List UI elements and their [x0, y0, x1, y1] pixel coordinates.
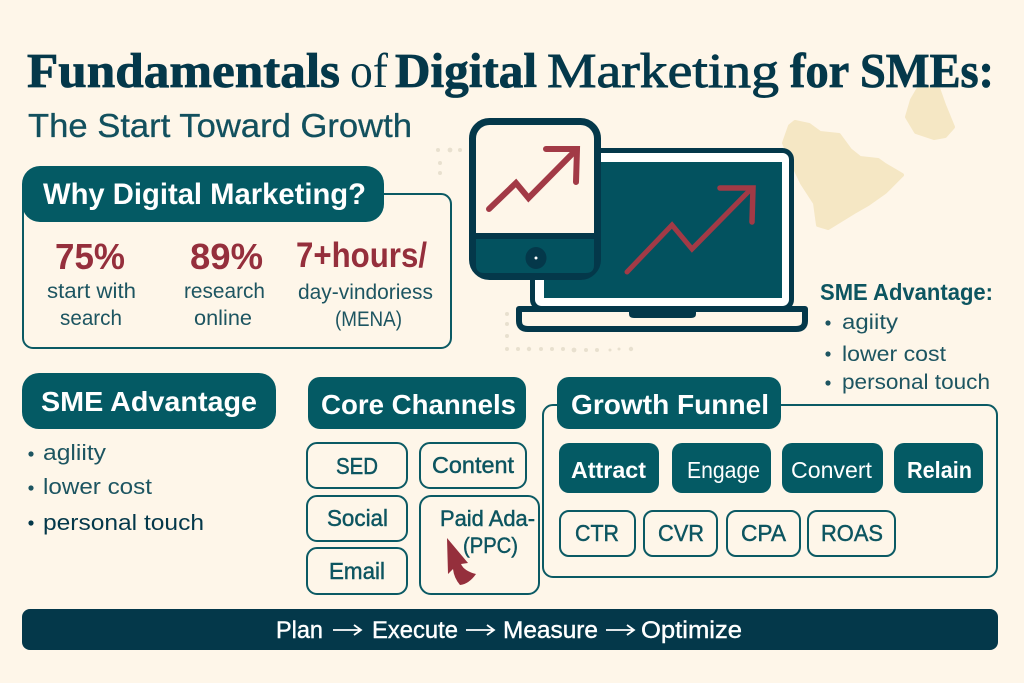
heading: sme advantage [22, 373, 276, 429]
channel: social [307, 496, 407, 541]
bullet list: lower cost [43, 474, 152, 499]
text block: sme advantage (right): SME Advantage: [820, 279, 993, 305]
stat: 89%: 89% [190, 236, 263, 277]
stage: retain [894, 443, 983, 493]
stat: 7+ hours: 7+hours/ [296, 236, 427, 275]
metric: CVR [644, 511, 717, 556]
subtitle: The Start Toward Growth [28, 107, 412, 144]
channel: SED [307, 443, 407, 488]
metric: CPA: CPA [741, 520, 787, 546]
text block: sme advantage (right): agiity [842, 311, 899, 334]
title: for SMEs: [790, 43, 994, 98]
channel: content: Content [432, 452, 515, 478]
stat: 89% [184, 236, 265, 330]
stage: attract: Attract [571, 457, 646, 483]
channel: social: Social [327, 505, 388, 531]
channel: email: Email [329, 558, 385, 584]
heading: core channels: Core Channels [321, 389, 516, 420]
panel: why digital marketing [22, 166, 451, 348]
stage: engage: Engage [687, 457, 760, 483]
channel: SED: SED [336, 453, 378, 479]
icon: laptop with growth chart [519, 150, 805, 329]
stat: 89%: research [184, 280, 265, 303]
stage: retain: Relain [907, 457, 972, 483]
title: Marketing [547, 43, 779, 98]
panel: core channels [307, 377, 539, 594]
heading: growth funnel: Growth Funnel [571, 389, 769, 420]
stage: convert: Convert [791, 457, 873, 483]
stat: 7+ hours: (MENA) [335, 308, 402, 331]
stage: attract [559, 443, 659, 493]
text block: sme advantage (right) [820, 279, 993, 394]
metric: CPA [727, 511, 800, 556]
process bar: Plan [276, 617, 323, 644]
heading: why digital marketing [22, 166, 384, 222]
icon: tablet with growth chart [472, 122, 598, 276]
text block: sme advantage (right): lower cost [842, 343, 946, 366]
heading: core channels [308, 377, 526, 429]
bullet list [28, 440, 204, 535]
stat: 75%: search [60, 307, 122, 330]
heading: why digital marketing: Why Digital Marketing? [43, 178, 366, 211]
bullet list: personal touch [43, 510, 204, 535]
stage: convert [782, 443, 883, 493]
metric: ROAS [808, 511, 895, 556]
channel: paid ads: (PPC) [463, 533, 518, 558]
channel: content [420, 443, 526, 488]
channel: email [307, 548, 407, 594]
heading: sme advantage: SME Advantage [41, 386, 257, 417]
stat: 75% [47, 236, 136, 330]
channel: paid ads: Paid Ada- [440, 506, 535, 531]
text block: sme advantage (right): personal touch [842, 371, 990, 394]
title: of [350, 43, 389, 98]
metric: CTR: CTR [575, 520, 619, 546]
metric: ROAS: ROAS [821, 520, 883, 546]
process bar [22, 609, 998, 650]
process bar: Measure [503, 617, 598, 644]
metric: CTR [560, 511, 635, 556]
bullet list: agliity [43, 440, 106, 465]
background map shapes [784, 88, 953, 228]
channel: paid ads [420, 496, 539, 594]
icon: cursor [447, 538, 476, 585]
stat: 75%: start with [47, 280, 136, 303]
title: Fundamentals [27, 43, 340, 98]
process bar: Execute [372, 617, 458, 644]
process bar: Optimize [641, 617, 742, 644]
panel: growth funnel [543, 377, 997, 577]
stat: 89%: online [194, 307, 252, 330]
title: Digital [395, 43, 537, 98]
title [27, 43, 994, 98]
heading: growth funnel [557, 377, 781, 429]
stat: 7+ hours: day-vindoriess [298, 281, 433, 304]
stat: 7+ hours [296, 236, 433, 331]
stage: engage [672, 443, 771, 493]
metric: CVR: CVR [658, 520, 704, 546]
panel: sme advantage [22, 373, 276, 535]
stat: 75%: 75% [55, 236, 125, 277]
